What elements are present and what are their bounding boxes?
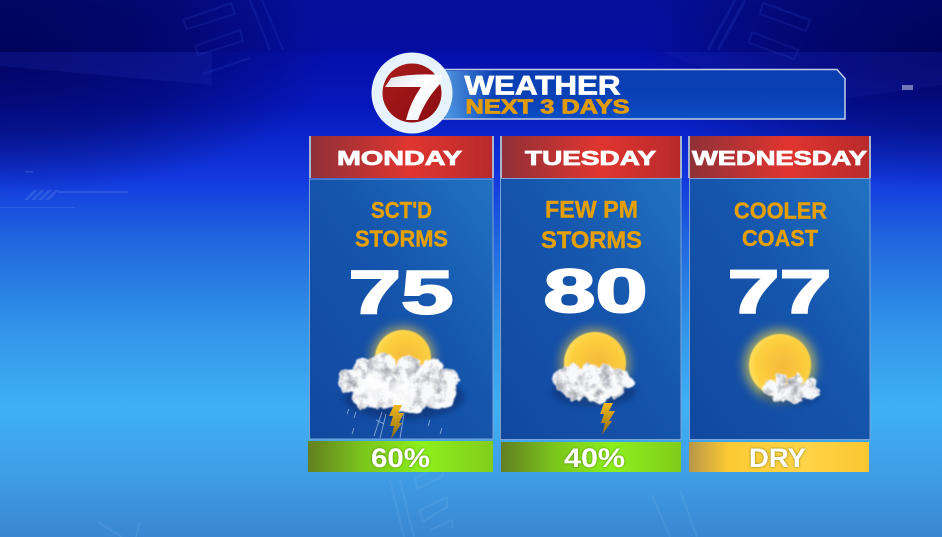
monday header: MONDAY	[337, 148, 463, 170]
monday card	[310, 179, 493, 439]
tuesday precipitation: 40%	[564, 443, 625, 473]
wednesday header: WEDNESDAY	[692, 148, 868, 170]
wednesday condition: COAST	[742, 225, 818, 251]
monday condition	[355, 197, 448, 252]
monday precipitation: 60%	[371, 443, 430, 473]
title: weather: WEATHER	[464, 70, 620, 100]
panel: wednesday	[688, 136, 870, 473]
wednesday precipitation	[689, 442, 869, 473]
tuesday precipitation	[501, 442, 681, 473]
wednesday header	[688, 136, 870, 178]
tuesday temperature: 80	[544, 257, 648, 325]
title banner	[430, 70, 845, 119]
wednesday temperature: 77	[728, 258, 832, 326]
tuesday condition: STORMS	[541, 227, 642, 254]
monday header	[309, 136, 493, 178]
panel: tuesday	[500, 136, 681, 473]
icon: sun and small cloud	[744, 329, 821, 405]
tuesday card	[500, 178, 681, 440]
wednesday card	[690, 178, 870, 440]
panel: monday	[308, 136, 493, 473]
tuesday condition: FEW PM	[545, 196, 638, 224]
monday temperature: 75	[348, 258, 454, 326]
tuesday header	[500, 136, 681, 178]
wednesday condition	[734, 198, 827, 251]
monday condition: STORMS	[355, 226, 448, 252]
monday precipitation	[308, 441, 493, 473]
tuesday header: TUESDAY	[525, 148, 657, 170]
wednesday condition: COOLER	[734, 198, 827, 224]
wednesday precipitation: DRY	[749, 443, 806, 473]
tuesday condition	[541, 196, 642, 254]
icon: sun, cloud and lightning	[552, 328, 636, 435]
monday condition: SCT'D	[371, 197, 432, 223]
small light marker	[902, 85, 913, 90]
icon: sun behind storm cloud	[338, 326, 464, 439]
logo: channel 7	[372, 52, 452, 134]
subtitle: next 3 days: NEXT 3 DAYS	[466, 96, 630, 118]
